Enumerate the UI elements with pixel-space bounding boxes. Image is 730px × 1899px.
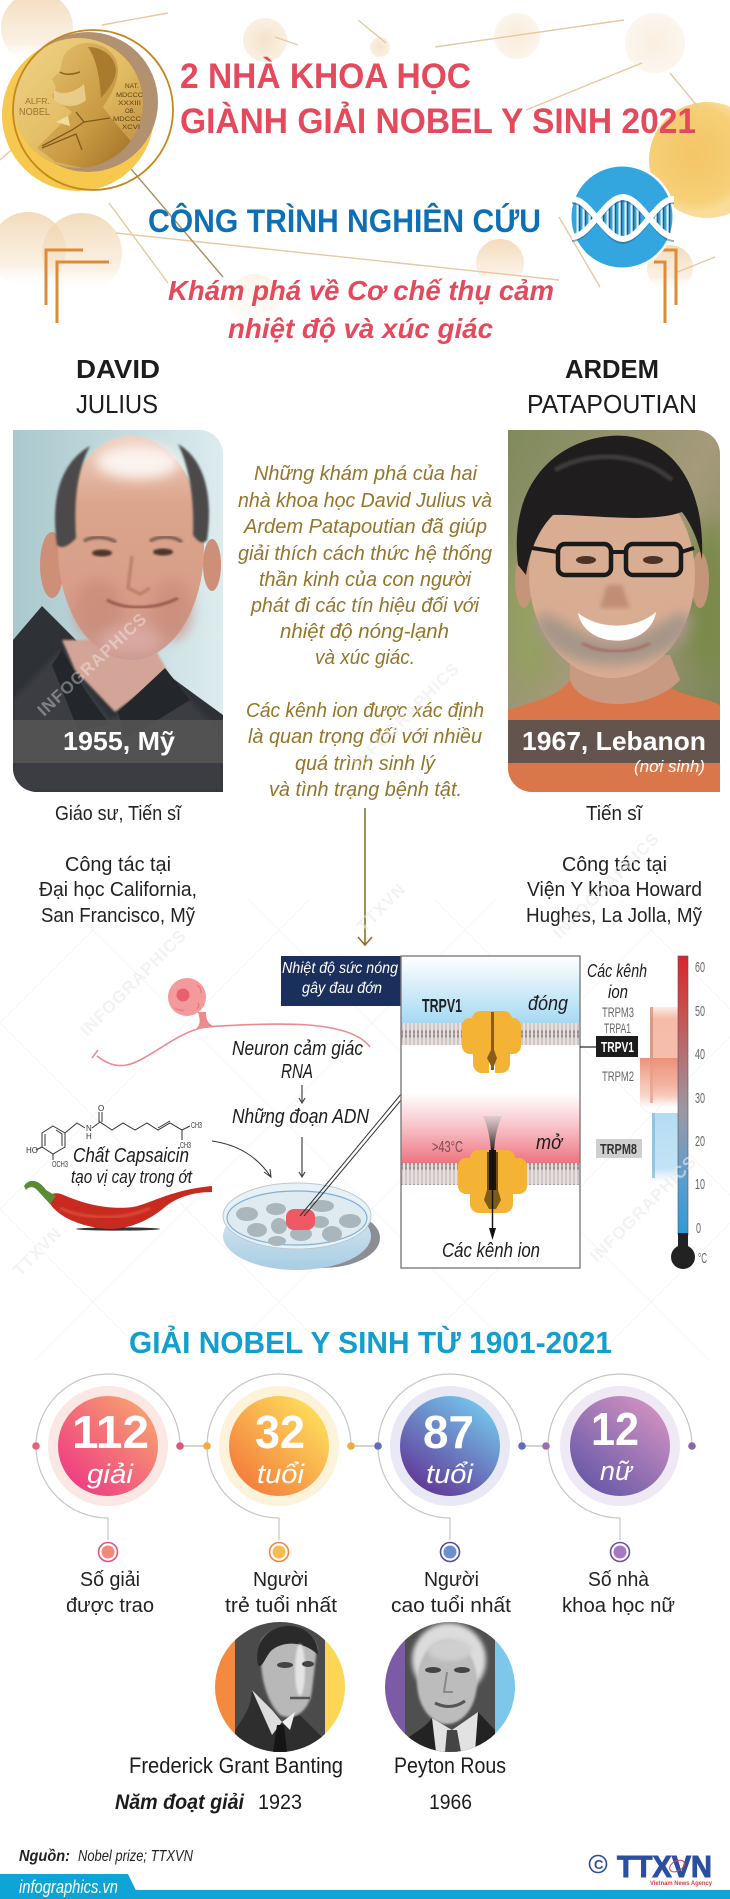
icon: neuron: [92, 978, 370, 1066]
intro text: nhiệt độ nóng-lạnh: [280, 621, 449, 643]
logo: TTXVN: [590, 1849, 712, 1887]
stat: 87 years: 87: [423, 1406, 474, 1458]
name: Ardem Patapoutian: PATAPOUTIAN: [527, 389, 697, 419]
source: [19, 1848, 193, 1865]
label: award year: Năm đoạt giải: [115, 1791, 245, 1814]
intro text: Các kênh ion được xác định: [246, 700, 484, 722]
intro text: là quan trọng đối với nhiều: [248, 726, 482, 748]
title: [180, 56, 696, 141]
chart: temperature ranges: [640, 1007, 678, 1183]
gold Nobel medal: NOBEL: [19, 107, 50, 118]
arrow: capsaicin to dish: [212, 1141, 271, 1177]
label: birth year David: 1955, Mỹ: [63, 726, 176, 756]
text: Ardem Patapoutian details: Viện Y khoa Howard: [527, 879, 702, 901]
callout: heat: gây đau đớn: [302, 980, 382, 997]
intro text: Ardem Patapoutian đã giúp: [243, 516, 487, 538]
chart: thermometer: 10: [695, 1176, 705, 1193]
number: 1966: 1966: [429, 1791, 472, 1814]
gold Nobel medal: MDCCC: [113, 116, 141, 123]
text: capsaicin: Chất Capsaicin: [73, 1145, 189, 1167]
stat: 32 years: 32: [255, 1406, 305, 1458]
chart: capsaicin molecule: CH3: [191, 1121, 202, 1130]
corner brackets: [46, 250, 676, 323]
subtitle: [168, 275, 554, 344]
text: process steps: [232, 1038, 369, 1128]
text: David Julius details: Công tác tại: [65, 854, 171, 876]
stat: 32 years: tuổi: [257, 1459, 305, 1489]
name: David Julius: JULIUS: [76, 389, 158, 419]
label: ion channels: Các kênh ion: [442, 1240, 540, 1262]
gold Nobel medal: NAT.: [125, 83, 139, 90]
gold Nobel medal: OB.: [125, 109, 136, 115]
name: David Julius: DAVID: [76, 354, 160, 384]
text: process steps: RNA: [281, 1061, 313, 1083]
chart: thermometer: °C: [698, 1250, 707, 1267]
intro text: và xúc giác.: [315, 647, 415, 669]
stat: 112 prizes: giải: [87, 1459, 134, 1489]
stat: 32 years: trẻ tuổi nhất: [225, 1595, 337, 1617]
stat: 87 years: tuổi: [426, 1459, 474, 1489]
name: David Julius: [76, 354, 160, 419]
chart: capsaicin molecule: CH3: [180, 1141, 191, 1150]
footer band: [0, 1874, 730, 1899]
arrow: RNA to DNA: [299, 1085, 305, 1103]
text: process steps: Những đoạn ADN: [232, 1106, 369, 1128]
text: ion channel list: TRPM2: [602, 1068, 634, 1084]
text: Ardem Patapoutian details: Hughes, La Jolla, Mỹ: [526, 905, 702, 927]
arrow: DNA to dish: [299, 1137, 305, 1177]
watermarks: INFOGRAPHICS: [549, 829, 663, 943]
chart: thermometer: 30: [695, 1090, 705, 1107]
golden network background: [0, 0, 730, 326]
label: temperature threshold: >43°C: [432, 1139, 463, 1156]
intro text: phát đi các tín hiệu đối với: [250, 595, 480, 617]
logo: TTXVN: Vietnam News Agency: [650, 1880, 712, 1887]
gold Nobel medal: [2, 30, 173, 191]
text: David Julius details: Giáo sư, Tiến sĩ: [55, 803, 182, 825]
text: David Julius details: Đại học California,: [39, 879, 197, 901]
subtitle: nhiệt độ và xúc giác: [228, 313, 493, 344]
text: ion channel list: Các kênh: [587, 961, 647, 981]
callout: heat: [281, 956, 401, 1006]
name: Ardem Patapoutian: [527, 354, 697, 419]
heading: Nobel 1901-2021: GIẢI NOBEL Y SINH TỪ 1901-2021: [129, 1324, 612, 1360]
chart: thermometer: 50: [695, 1003, 705, 1020]
logo: TTXVN: C: [594, 1857, 604, 1872]
number: 1923: 1923: [258, 1791, 302, 1814]
watermarks: INFOGRAPHICS: [586, 1152, 700, 1266]
watermarks: INFOGRAPHICS: [34, 609, 151, 720]
text: Ardem Patapoutian details: Công tác tại: [562, 854, 667, 876]
intro text: nhà khoa học David Julius và: [238, 490, 492, 512]
icon: chili pepper: [24, 1181, 212, 1231]
intro text: giải thích cách thức hệ thống: [238, 543, 492, 565]
source: Nobel prize; TTXVN: [78, 1848, 193, 1865]
watermarks: INFOGRAPHICS: [349, 659, 463, 773]
watermarks: [9, 609, 700, 1280]
chart: capsaicin molecule: HO: [26, 1146, 38, 1155]
watermarks: TTXVN: [353, 879, 410, 936]
text: ion channel list: TRPM8: [600, 1141, 637, 1158]
text: ion channel list: TRPV1: [601, 1039, 634, 1056]
text: Ardem Patapoutian details: Tiến sĩ: [586, 803, 643, 825]
photo: Ardem Patapoutian: [506, 430, 730, 792]
label: birth year Ardem: 1967, Lebanon: [522, 726, 706, 756]
text: ion channel list: TRPA1: [604, 1020, 631, 1036]
label: birth year Ardem: (nơi sinh): [634, 757, 705, 776]
text: Rous name: Peyton Rous: [394, 1753, 506, 1778]
chart: thermometer: 20: [695, 1133, 705, 1150]
text: process steps: Neuron cảm giác: [232, 1038, 363, 1060]
watermarks: INFOGRAPHICS: [76, 926, 190, 1040]
stat: 12 women: khoa học nữ: [562, 1595, 675, 1617]
stat: 112 prizes: [32, 1374, 184, 1617]
callout: heat: Nhiệt độ sức nóng: [282, 960, 398, 977]
label: closed: đóng: [528, 993, 568, 1015]
stat: 32 years: [203, 1374, 355, 1617]
intro text: [238, 463, 492, 801]
text: capsaicin: [71, 1145, 193, 1187]
text: ion channel list: TRPM3: [602, 1004, 634, 1020]
text: Banting name: Frederick Grant Banting: [129, 1753, 343, 1778]
gold Nobel medal: XCVI: [122, 124, 140, 131]
subtitle: Khám phá về Cơ chế thụ cảm: [168, 275, 554, 306]
chart: capsaicin molecule: OCH3: [52, 1160, 68, 1169]
title: GIÀNH GIẢI NOBEL Y SINH 2021: [180, 101, 696, 141]
stat: 32 years: Người: [253, 1569, 308, 1591]
footer band: infographics.vn: [19, 1877, 118, 1897]
chart: capsaicin molecule: N: [86, 1124, 92, 1133]
chart: capsaicin molecule: [26, 1104, 202, 1169]
chart: thermometer: 40: [695, 1046, 705, 1063]
stat: 112 prizes: 112: [72, 1406, 149, 1458]
portrait: Peyton Rous: [385, 1622, 515, 1760]
title: 2 NHÀ KHOA HỌC: [180, 56, 471, 96]
text: ion channel list: ion: [608, 982, 628, 1002]
heading: TRPV1: TRPV1: [422, 996, 462, 1016]
chart: thermometer: 0: [696, 1220, 701, 1237]
intro text: và tình trạng bệnh tật.: [269, 779, 462, 801]
text: Ardem Patapoutian details: [526, 803, 702, 927]
panel: TRPV1 channel: [401, 956, 580, 1268]
logo: TTXVN: TTXVN: [617, 1849, 712, 1884]
chart: thermometer: 60: [695, 959, 705, 976]
icon: DNA: [569, 164, 675, 270]
text: David Julius details: [39, 803, 197, 927]
stat: 12 women: 12: [591, 1403, 639, 1455]
watermarks: TTXVN: [9, 1223, 66, 1280]
intro text: thần kinh của con người: [259, 569, 472, 591]
heading: research work: CÔNG TRÌNH NGHIÊN CỨU: [148, 203, 541, 239]
label: birth year Ardem: [522, 726, 706, 776]
portrait: Frederick Grant Banting: [215, 1622, 345, 1760]
source: Nguồn:: [19, 1848, 70, 1865]
intro text: quá trình sinh lý: [295, 753, 436, 775]
chart: thermometer: [671, 956, 707, 1269]
stat: 87 years: [374, 1374, 526, 1617]
stat: 12 women: Số nhà: [588, 1569, 650, 1591]
chart: capsaicin molecule: O: [98, 1104, 104, 1113]
intro text: Những khám phá của hai: [254, 463, 478, 485]
text: David Julius details: San Francisco, Mỹ: [41, 905, 195, 927]
icon: closed channel: [462, 1011, 521, 1074]
icon: petri dish: [223, 1093, 402, 1270]
stat: 112 prizes: được trao: [66, 1595, 154, 1617]
label: open: mở: [536, 1132, 564, 1154]
stat: 87 years: cao tuổi nhất: [391, 1595, 511, 1617]
stat: 12 women: [542, 1374, 696, 1617]
stat: 87 years: Người: [424, 1569, 479, 1591]
name: Ardem Patapoutian: ARDEM: [565, 354, 659, 384]
chart: capsaicin molecule: H: [86, 1132, 92, 1141]
photo: David Julius: [13, 430, 223, 792]
icon: open channel: [458, 1116, 527, 1240]
gold Nobel medal: XXXIII: [118, 100, 141, 107]
stat: 112 prizes: Số giải: [80, 1569, 140, 1591]
stat: 12 women: nữ: [600, 1456, 634, 1486]
text: ion channel list: [580, 961, 647, 1158]
text: capsaicin: tạo vị cay trong ớt: [71, 1167, 193, 1187]
gold Nobel medal: MDCCC: [116, 92, 143, 99]
gold Nobel medal: ALFR.: [25, 97, 50, 106]
arrow: to research diagram: [358, 808, 372, 945]
connector lines: [180, 1445, 548, 1447]
